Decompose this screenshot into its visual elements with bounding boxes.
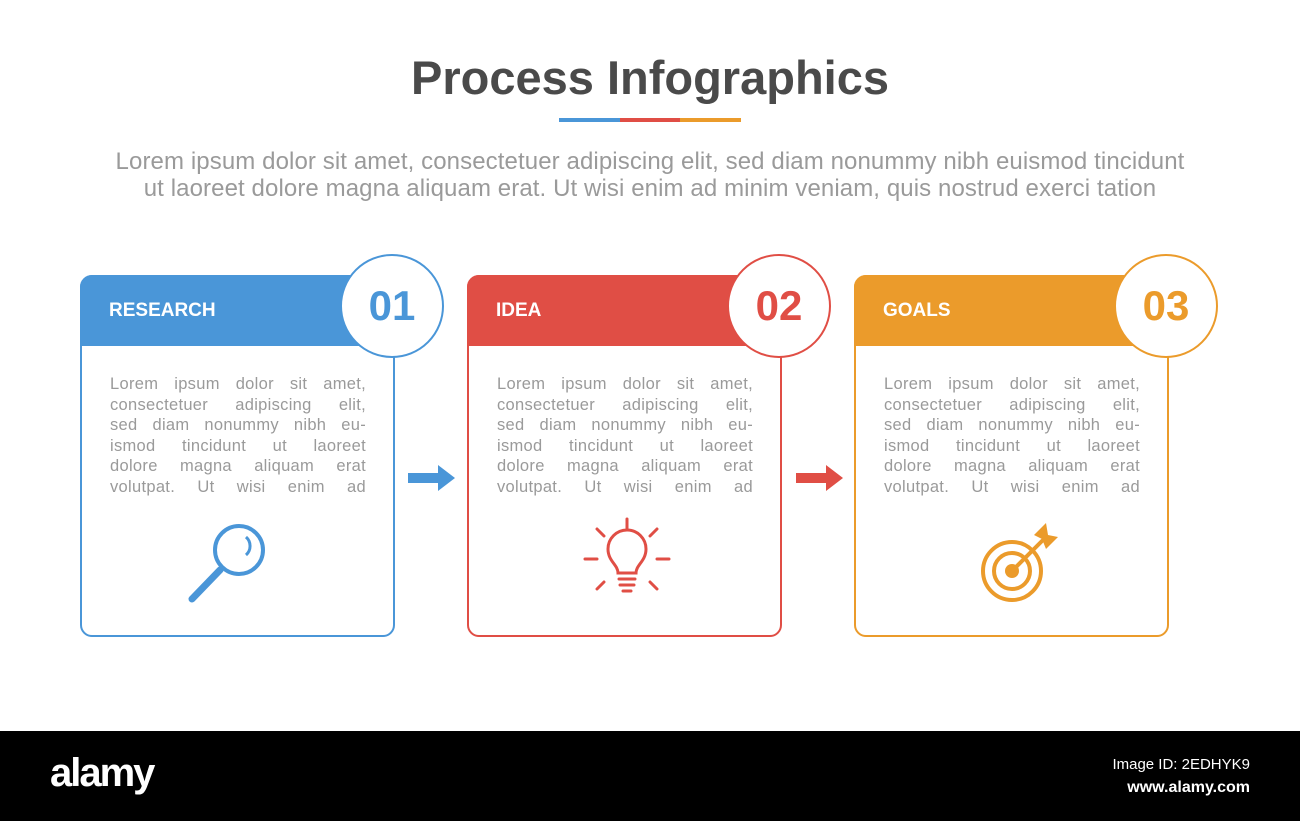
number circle 01 (340, 254, 444, 358)
text block: sed diam nonummy nibh eu- (884, 416, 1140, 434)
text block: sed diam nonummy nibh eu- (497, 416, 753, 434)
header: research (80, 275, 380, 346)
text block: Lorem ipsum dolor sit amet, (497, 375, 753, 393)
icon: magnifier (188, 524, 265, 602)
text block: ismod tincidunt ut laoreet (110, 437, 366, 455)
text block: dolore magna aliquam erat (884, 457, 1140, 475)
text block: volutpat. Ut wisi enim ad (110, 478, 366, 496)
panel: idea (467, 275, 782, 637)
subtitle (116, 148, 1184, 202)
text block: dolore magna aliquam erat (110, 457, 366, 475)
text block: sed diam nonummy nibh eu- (110, 416, 366, 434)
number circle 03: 03 (1143, 282, 1189, 329)
arrow 2 (796, 465, 843, 491)
text block: consectetuer adipiscing elit, (497, 396, 753, 414)
text block: consectetuer adipiscing elit, (884, 396, 1140, 414)
footer id: Image ID: 2EDHYK9 (1112, 756, 1250, 773)
header: goals: GOALS (883, 300, 951, 321)
text block: Lorem ipsum dolor sit amet, (884, 375, 1140, 393)
number circle 01: 01 (369, 282, 415, 329)
title underline (559, 118, 741, 122)
title: Process Infographics (411, 51, 889, 104)
header: research: RESEARCH (109, 300, 216, 321)
text block: volutpat. Ut wisi enim ad (497, 478, 753, 496)
subtitle: Lorem ipsum dolor sit amet, consectetuer adipiscing elit, sed diam nonummy nibh euismod tincidunt (116, 148, 1184, 175)
text block: Lorem ipsum dolor sit amet, (110, 375, 366, 393)
panel: research (80, 275, 395, 637)
text block: consectetuer adipiscing elit, (110, 396, 366, 414)
footer bar (0, 731, 1300, 821)
footer id (1112, 756, 1250, 796)
text block (884, 375, 1140, 496)
text block (497, 375, 753, 496)
footer logo: alamy (50, 751, 153, 795)
text block (110, 375, 366, 496)
header: goals (854, 275, 1154, 346)
panel: goals (854, 275, 1169, 637)
arrow 1 (408, 465, 455, 491)
text block: ismod tincidunt ut laoreet (884, 437, 1140, 455)
header: idea (467, 275, 767, 346)
subtitle: ut laoreet dolore magna aliquam erat. Ut wisi enim ad minim veniam, quis nostrud exerci tation (144, 175, 1156, 202)
number circle 03 (1114, 254, 1218, 358)
header: idea: IDEA (496, 300, 541, 321)
text block: ismod tincidunt ut laoreet (497, 437, 753, 455)
number circle 02 (727, 254, 831, 358)
footer id: www.alamy.com (1127, 779, 1250, 796)
icon: light bulb (584, 518, 670, 592)
text block: volutpat. Ut wisi enim ad (884, 478, 1140, 496)
text block: dolore magna aliquam erat (497, 457, 753, 475)
icon: target (981, 523, 1058, 602)
number circle 02: 02 (756, 282, 802, 329)
